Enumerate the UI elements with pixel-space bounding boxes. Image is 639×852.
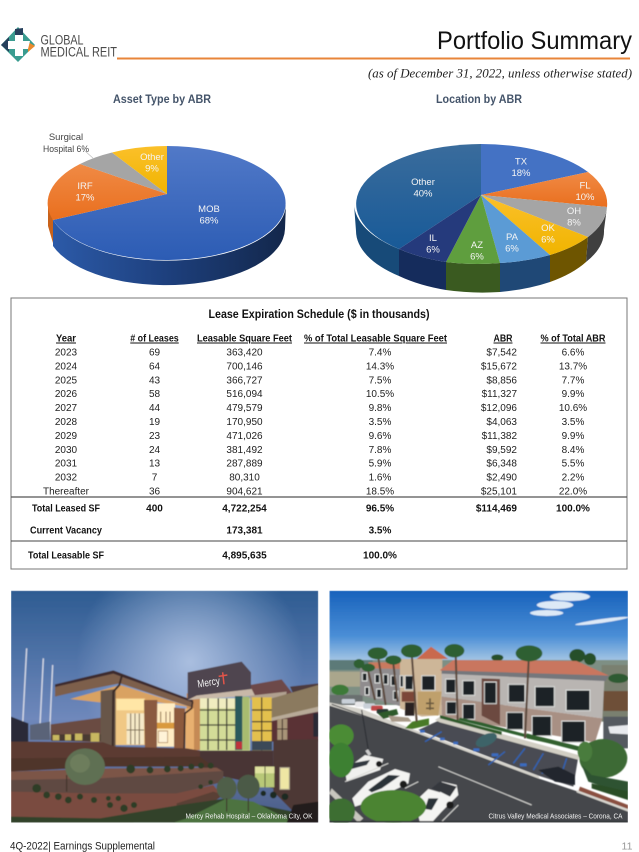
row 2031: $6,348 — [486, 459, 517, 470]
row 2025: $8,856 — [486, 375, 517, 386]
table header row: Leasable Square Feet — [197, 334, 293, 344]
row 2027: 2027 — [55, 403, 78, 414]
row 2023: 2023 — [55, 348, 78, 358]
row total leased: 96.5% — [366, 504, 394, 514]
row total leased: Total Leased SF — [32, 504, 100, 514]
row 2024: 700,146 — [226, 361, 263, 372]
label: FL: 10% — [575, 192, 595, 203]
row 2029: 9.6% — [369, 431, 392, 442]
label: IRF: 17% — [75, 193, 95, 204]
row 2023: 363,420 — [226, 348, 263, 358]
row 2028: 3.5% — [369, 417, 392, 428]
row 2032: 2.2% — [562, 473, 585, 484]
row current vacancy: 173,381 — [226, 526, 263, 536]
caption: Mercy Rehab Hospital: Mercy Rehab Hospital – Oklahoma City, OK — [186, 812, 312, 820]
row 2027: 10.6% — [559, 403, 587, 414]
table header row: % of Total ABR — [540, 334, 606, 344]
label: AZ: AZ — [471, 240, 483, 251]
row 2030: 8.4% — [562, 445, 585, 456]
row 2023 — [55, 348, 585, 358]
row 2030: 7.8% — [369, 445, 392, 456]
label: OK: OK — [541, 223, 555, 234]
sign: Mercy: Mercy — [197, 675, 221, 691]
row 2027: 9.8% — [369, 403, 392, 414]
logo wordmark — [40, 32, 117, 60]
table header row: % of Total Leasable Square Feet — [304, 334, 448, 344]
row thereafter: $25,101 — [481, 486, 517, 498]
row 2031: 5.9% — [369, 459, 392, 470]
label: surgical hospital: Surgical — [49, 132, 83, 143]
row 2029 — [55, 431, 585, 442]
table header row: # of Leases — [130, 334, 179, 344]
row total leased: $114,469 — [476, 504, 517, 514]
row 2024 — [55, 361, 587, 372]
label: TX: TX — [515, 156, 527, 168]
row 2029: 9.9% — [562, 431, 585, 442]
row 2023: 7.4% — [369, 348, 392, 358]
row thereafter: 22.0% — [559, 486, 587, 498]
row 2027: 44 — [149, 403, 160, 414]
row 2031: 13 — [149, 459, 160, 470]
row 2031 — [55, 459, 585, 470]
label: surgical hospital — [43, 132, 89, 155]
row 2029: 2029 — [55, 431, 78, 442]
row total leased: 400 — [146, 504, 163, 514]
label: MOB: 68% — [199, 216, 219, 227]
row 2026: 10.5% — [366, 389, 394, 400]
label: OK: 6% — [541, 235, 555, 246]
row 2028: 2028 — [55, 417, 78, 428]
label: IL: IL — [429, 233, 437, 244]
row total leasable — [28, 550, 397, 562]
label: other: Other — [411, 177, 435, 188]
table header row — [56, 334, 606, 344]
row 2026: 58 — [149, 389, 160, 400]
row 2025: 43 — [149, 375, 160, 386]
row thereafter: Thereafter — [43, 486, 90, 498]
row total leased: 100.0% — [556, 504, 590, 514]
row 2030: 2030 — [55, 445, 78, 456]
row 2024: 64 — [149, 361, 160, 372]
row 2028: $4,063 — [486, 417, 517, 428]
row 2024: 2024 — [55, 361, 78, 372]
row 2028: 19 — [149, 417, 160, 428]
label: PA: 6% — [505, 244, 519, 255]
label: other: 40% — [413, 189, 433, 200]
label: TX: 18% — [511, 168, 531, 179]
heading: location: Location by ABR — [436, 94, 523, 106]
label: IRF: IRF — [77, 181, 93, 192]
row 2030: 381,492 — [226, 445, 263, 456]
row total leased — [32, 504, 590, 514]
row thereafter: 904,621 — [226, 486, 263, 498]
row 2028: 3.5% — [562, 417, 585, 428]
row current vacancy: Current Vacancy — [30, 526, 102, 536]
label: PA: PA — [506, 232, 518, 243]
logo — [1, 27, 117, 62]
panel: lease expiration table — [11, 298, 627, 569]
icon: medical cross logo mark — [1, 27, 35, 62]
row 2024: $15,672 — [481, 361, 517, 372]
row 2029: 23 — [149, 431, 160, 442]
row 2031: 287,889 — [226, 459, 263, 470]
row 2023: 69 — [149, 348, 160, 358]
table header row: Year — [56, 334, 76, 344]
row thereafter: 18.5% — [366, 486, 394, 498]
table header row: ABR — [494, 334, 513, 344]
row 2029: $11,382 — [482, 431, 517, 442]
row 2030: $9,592 — [486, 445, 517, 456]
label: OH: 8% — [567, 218, 581, 229]
row 2026 — [55, 389, 585, 400]
row 2027: $12,096 — [481, 403, 517, 414]
row 2032: 2032 — [55, 473, 78, 484]
logo wordmark: MEDICAL REIT — [40, 44, 117, 60]
row current vacancy — [30, 526, 392, 536]
row 2026: 9.9% — [562, 389, 585, 400]
row 2025 — [55, 375, 585, 386]
row total leasable: 4,895,635 — [222, 550, 267, 562]
heading: asset type: Asset Type by ABR — [113, 94, 212, 106]
pie chart: location by ABR — [354, 144, 607, 293]
row 2026: $11,327 — [482, 389, 517, 400]
row 2026: 516,094 — [226, 389, 263, 400]
pie chart: asset type by ABR — [43, 132, 286, 285]
subtitle: (as of December 31, 2022, unless otherwise stated) — [368, 66, 632, 80]
row 2023: $7,542 — [486, 348, 517, 358]
row total leased: 4,722,254 — [222, 504, 267, 514]
row 2023: 6.6% — [562, 348, 585, 358]
row 2029: 471,026 — [226, 431, 263, 442]
row 2032: 80,310 — [229, 473, 260, 484]
row 2027 — [55, 403, 587, 414]
row thereafter: 36 — [149, 486, 160, 498]
row 2028 — [55, 417, 585, 428]
row 2028: 170,950 — [226, 417, 263, 428]
table title: Lease Expiration Schedule ($ in thousands) — [208, 309, 430, 321]
row 2024: 14.3% — [366, 361, 394, 372]
row 2030 — [55, 445, 585, 456]
row total leasable: 100.0% — [363, 550, 397, 562]
label: AZ: 6% — [470, 252, 484, 263]
label: other: Other — [140, 152, 164, 163]
row 2032: 7 — [152, 473, 158, 484]
row 2032 — [55, 473, 585, 484]
title: Portfolio Summary — [437, 27, 632, 55]
photo: Citrus Valley Medical Associates — [327, 591, 628, 825]
label: IL: 6% — [426, 245, 440, 256]
row 2027: 479,579 — [226, 403, 263, 414]
row 2031: 2031 — [55, 459, 78, 470]
row 2032: 1.6% — [369, 473, 392, 484]
row 2032: $2,490 — [486, 473, 517, 484]
logo wordmark: GLOBAL — [40, 32, 84, 48]
row thereafter — [43, 486, 587, 498]
label: surgical hospital: Hospital 6% — [43, 144, 89, 155]
label: OH: OH — [567, 206, 581, 217]
row 2026: 2026 — [55, 389, 78, 400]
label: FL: FL — [579, 180, 591, 192]
row 2025: 7.7% — [562, 375, 585, 386]
row total leasable: Total Leasable SF — [28, 550, 104, 562]
label: other: 9% — [145, 164, 159, 175]
row 2025: 366,727 — [226, 375, 263, 386]
row 2025: 7.5% — [369, 375, 392, 386]
photo: Mercy Rehab Hospital — [11, 591, 318, 823]
row current vacancy: 3.5% — [369, 526, 392, 536]
label: MOB: MOB — [198, 204, 220, 215]
row 2031: 5.5% — [562, 459, 585, 470]
row 2025: 2025 — [55, 375, 78, 386]
caption: Citrus Valley Medical Associates: Citrus Valley Medical Associates – Corona, CA — [488, 812, 622, 820]
row 2030: 24 — [149, 445, 160, 456]
row 2024: 13.7% — [559, 361, 587, 372]
